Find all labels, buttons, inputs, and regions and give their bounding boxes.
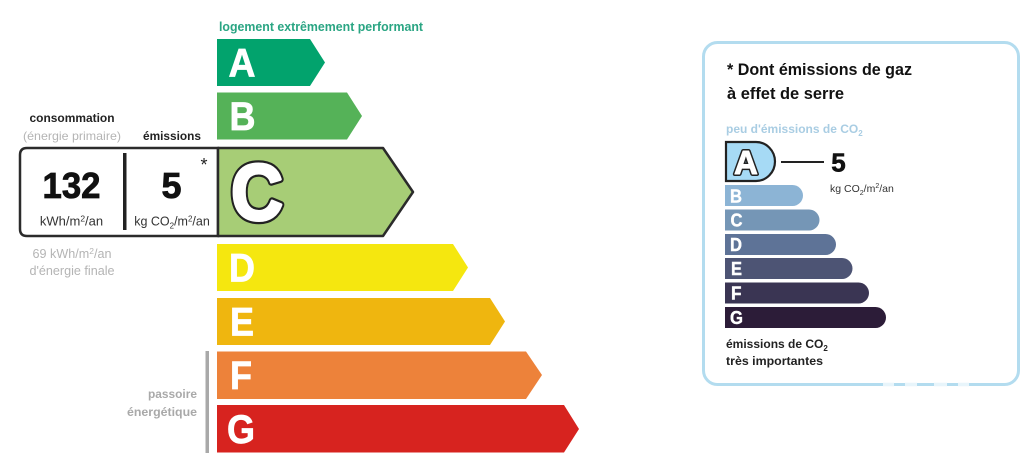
GES bar G: [725, 307, 886, 328]
label: émissions: émissions: [143, 129, 201, 143]
GES unit: 2: [875, 183, 879, 190]
scale bottom label: 2: [823, 344, 828, 353]
panel heading: [727, 61, 912, 103]
values box: [20, 148, 218, 236]
panel heading: à effet de serre: [727, 85, 844, 103]
energy bar A: A: [228, 42, 256, 86]
emissions unit: kg CO: [134, 214, 170, 228]
note: final energy: d'énergie finale: [30, 264, 114, 278]
GES bar B: [725, 185, 803, 206]
emissions unit: /an: [192, 214, 210, 228]
GES value: 5: [831, 148, 846, 178]
GES bar A highlighted: A: [734, 144, 758, 181]
label: passoire énergétique: énergétique: [127, 405, 197, 419]
emissions unit: 2: [170, 222, 175, 230]
GES bar D: D: [730, 235, 742, 255]
scale top label: peu d'émissions de CO: [726, 122, 858, 136]
energy bar E: [217, 298, 505, 345]
energy bar G: [217, 405, 579, 452]
energy bar D: [217, 244, 468, 291]
energy bar E: E: [230, 300, 254, 344]
GES bar D: [725, 234, 836, 255]
note: final energy: 2: [89, 246, 94, 256]
GES unit: kg CO: [830, 183, 860, 195]
letter C: C: [231, 148, 283, 236]
GES bar E: E: [731, 259, 742, 279]
energy bar F: [217, 352, 542, 399]
GES bar C: C: [730, 210, 742, 230]
asterisk: *: [200, 155, 208, 175]
GES unit: /m: [864, 183, 876, 195]
energy bar B: [217, 92, 362, 140]
GES bar A highlighted: [726, 142, 775, 181]
note: final energy: [30, 246, 114, 278]
energy bar B: B: [230, 95, 256, 139]
label: consommation: consommation: [30, 111, 114, 125]
energy bar F: F: [230, 354, 252, 398]
consumption value: 132: [42, 165, 100, 206]
consumption unit: /an: [85, 214, 103, 228]
consumption unit: kWh/m: [40, 214, 80, 228]
label: passoire énergétique: passoire: [148, 387, 197, 401]
emissions unit: /m: [174, 214, 188, 228]
scale bottom label: [726, 337, 828, 368]
emissions value: 5: [161, 165, 182, 206]
consumption unit: 2: [80, 214, 85, 224]
GES bar C: [725, 210, 820, 230]
GES bar A highlighted: A: [734, 144, 758, 181]
bar C highlighted: [218, 148, 413, 236]
GES bar F: [725, 282, 869, 304]
letter C: C: [231, 148, 283, 236]
GES bar G: G: [730, 308, 743, 328]
heading: top of scale: logement extrêmement performant: [219, 20, 424, 34]
panel: greenhouse gas emissions: [704, 42, 1018, 384]
note: final energy: /an: [94, 247, 111, 261]
connector line: [781, 161, 824, 163]
scale bottom label: émissions de CO: [726, 337, 823, 351]
energy bar A: [217, 39, 325, 86]
GES unit: 2: [860, 190, 864, 197]
GES bar F: F: [731, 284, 742, 304]
emissions unit: 2: [188, 214, 193, 224]
scale bottom label: très importantes: [726, 354, 823, 368]
GES unit: /an: [879, 183, 894, 195]
energy bar D: D: [229, 246, 255, 290]
active rating: C with values box: [20, 148, 413, 236]
divider: [123, 153, 126, 230]
label: énergie primaire: (énergie primaire): [23, 129, 121, 143]
scale top label: 2: [858, 129, 863, 138]
label: passoire énergétique: [127, 351, 209, 453]
energy bar G: G: [227, 408, 255, 452]
GES bar E: [725, 258, 852, 279]
GES bar B: B: [730, 186, 742, 206]
panel heading: * Dont émissions de gaz: [727, 61, 912, 79]
note: final energy: 69 kWh/m: [33, 247, 89, 261]
